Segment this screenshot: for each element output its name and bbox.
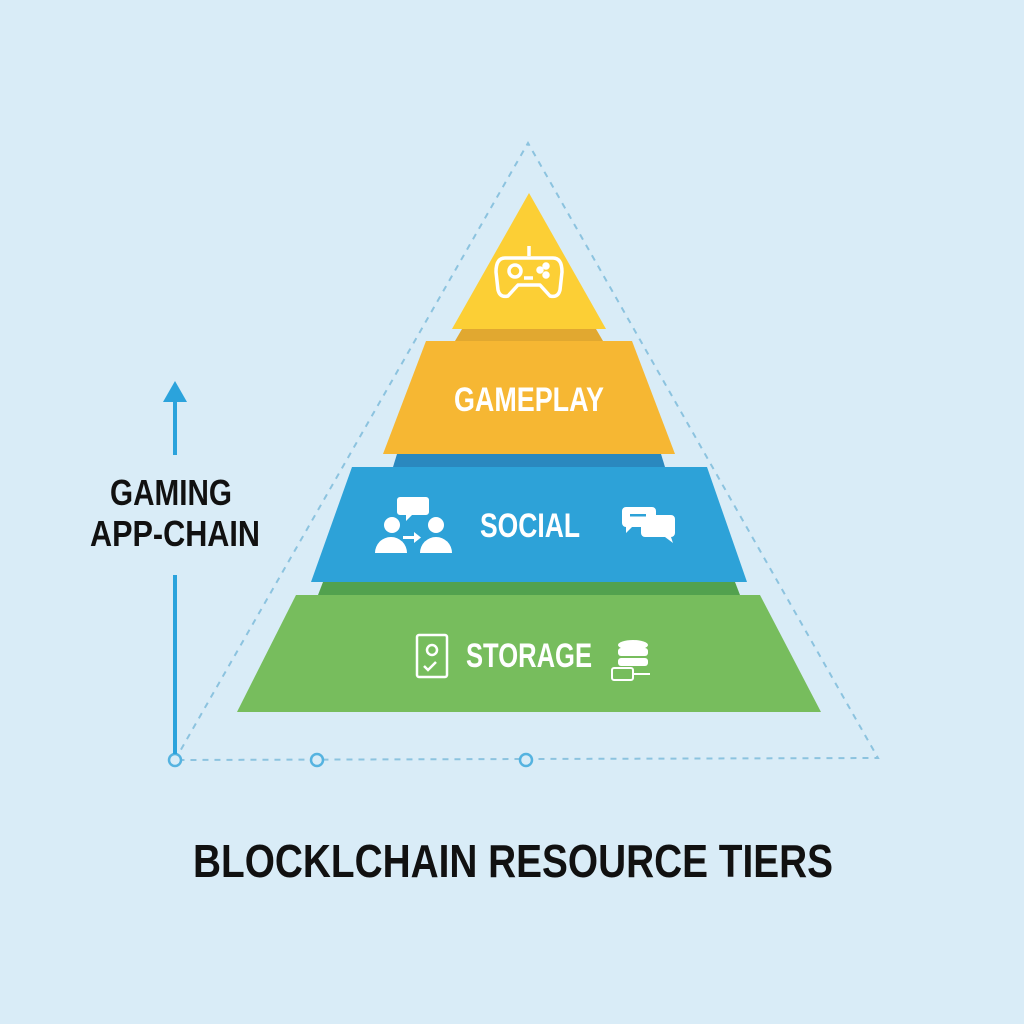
icon: gamepad [496, 246, 562, 296]
icon: database [612, 640, 650, 680]
icon: hard drive [417, 635, 447, 677]
tier: gameplay [383, 341, 675, 454]
tier: social [311, 467, 747, 582]
icon: chat bubbles [622, 507, 675, 543]
vertical arrow [163, 381, 187, 754]
tier: top icon triangle [452, 193, 606, 329]
baseline markers [169, 754, 532, 766]
tier: storage [237, 595, 821, 712]
axis label: APP-CHAIN [90, 513, 260, 554]
tier strip [455, 329, 603, 341]
dashed outer triangle [175, 143, 878, 760]
axis label [90, 472, 260, 554]
title: BLOCKLCHAIN RESOURCE TIERS [193, 835, 833, 887]
tier: gameplay: GAMEPLAY [454, 381, 604, 419]
icon: people exchange [375, 497, 452, 553]
tier: social: SOCIAL [480, 507, 580, 545]
axis label: GAMING [110, 472, 232, 513]
tier: storage: STORAGE [466, 637, 592, 675]
